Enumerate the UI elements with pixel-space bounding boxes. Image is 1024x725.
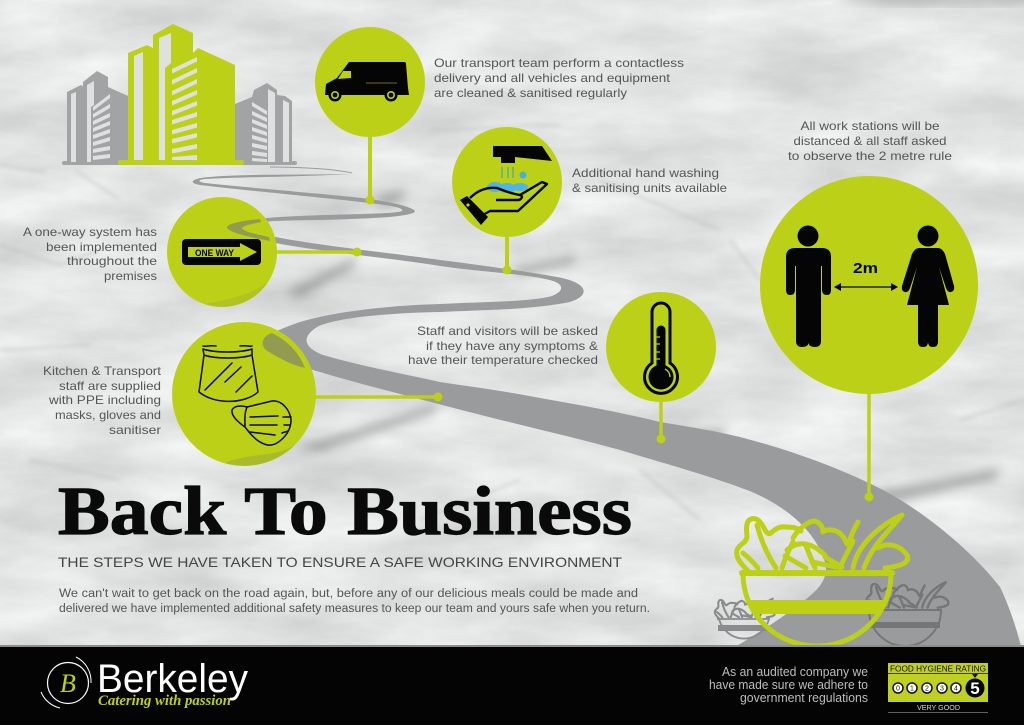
food hygiene rating badge: 0 [896, 686, 900, 692]
text: one-way system: premises [104, 269, 157, 283]
text: social distancing: distanced & all staff asked [794, 134, 946, 148]
drop shadows on marble [285, 190, 1000, 504]
icon: small grey salad bowl left [715, 599, 775, 639]
food hygiene rating badge: VERY GOOD [917, 703, 961, 712]
icon: one way sign: ONE WAY [195, 248, 235, 259]
footer statement: have made sure we adhere to [709, 678, 868, 692]
text: temperature check: if they have any symptoms & [426, 339, 598, 353]
text: temperature check: have their temperature checked [408, 353, 598, 367]
intro paragraph: delivered we have implemented additional safety measures to keep our team and yours safe when you return. [59, 603, 650, 615]
step: one-way system [167, 197, 362, 307]
food hygiene rating badge [888, 663, 988, 713]
grey buildings [62, 71, 297, 165]
icon: man [786, 226, 831, 347]
food hygiene rating badge: 4 [954, 686, 958, 692]
step: temperature check [606, 292, 716, 444]
Berkeley logo: Berkeley [97, 657, 248, 701]
footer bar [0, 645, 1024, 725]
text: PPE: masks, gloves and [55, 408, 161, 422]
text: PPE: staff are supplied [59, 379, 161, 393]
city buildings icon [62, 24, 297, 165]
food hygiene rating badge: 3 [940, 686, 944, 692]
text: PPE: sanitiser [109, 423, 161, 437]
text: PPE: with PPE including [48, 393, 161, 407]
food hygiene rating badge: FOOD HYGIENE RATING [890, 664, 986, 674]
step: transport van [315, 27, 425, 204]
icon: distance arrow [834, 261, 898, 291]
intro paragraph: We can't wait to get back on the road again, but, before any of our delicious meals could be made and [59, 588, 638, 600]
food hygiene rating badge: 1 [910, 686, 914, 692]
text: temperature check: Staff and visitors will be asked [417, 324, 598, 338]
icon: hand washing [460, 146, 552, 225]
icon: woman [902, 226, 954, 347]
lime main towers [118, 24, 244, 165]
subtitle: THE STEPS WE HAVE TAKEN TO ENSURE A SAFE WORKING ENVIRONMENT [58, 554, 622, 570]
text: one-way system: been implemented [46, 240, 157, 254]
winding road [193, 167, 1024, 660]
footer statement: As an audited company we [722, 665, 868, 679]
icon: small grey salad bowl right [866, 582, 948, 646]
text: transport: delivery and all vehicles and equipment [434, 71, 671, 85]
text: one-way system: throughout the [67, 254, 157, 268]
title: Back To Business [58, 473, 632, 549]
text: social distancing: All work stations will be [800, 119, 940, 133]
Berkeley logo: B [60, 669, 76, 698]
text: one-way system: A one-way system has [23, 225, 157, 239]
icon: thermometer [644, 303, 678, 393]
step: social distancing [760, 176, 978, 502]
icon: main salad bowl [737, 515, 908, 646]
text: transport: Our transport team perform a contactless [434, 56, 684, 70]
text: transport: are cleaned & sanitised regularly [434, 86, 627, 100]
Berkeley logo [41, 657, 248, 709]
icon: distance arrow: 2m [853, 261, 878, 277]
text: social distancing: to observe the 2 metre rule [788, 149, 952, 163]
footer statement: government regulations [740, 691, 868, 705]
step: PPE [172, 322, 442, 466]
Berkeley logo: Catering with passion [98, 693, 231, 709]
food hygiene rating badge: 5 [970, 679, 980, 698]
step: hand washing [452, 127, 562, 274]
icon: van [325, 62, 409, 102]
food hygiene rating badge: 2 [925, 686, 929, 692]
icon: face shield [199, 346, 258, 401]
text: PPE: Kitchen & Transport [43, 364, 162, 378]
icon: one way sign [182, 239, 261, 265]
text: hand washing: & sanitising units available [572, 181, 727, 195]
text: hand washing: Additional hand washing [572, 166, 719, 180]
icon: face mask [232, 401, 291, 445]
